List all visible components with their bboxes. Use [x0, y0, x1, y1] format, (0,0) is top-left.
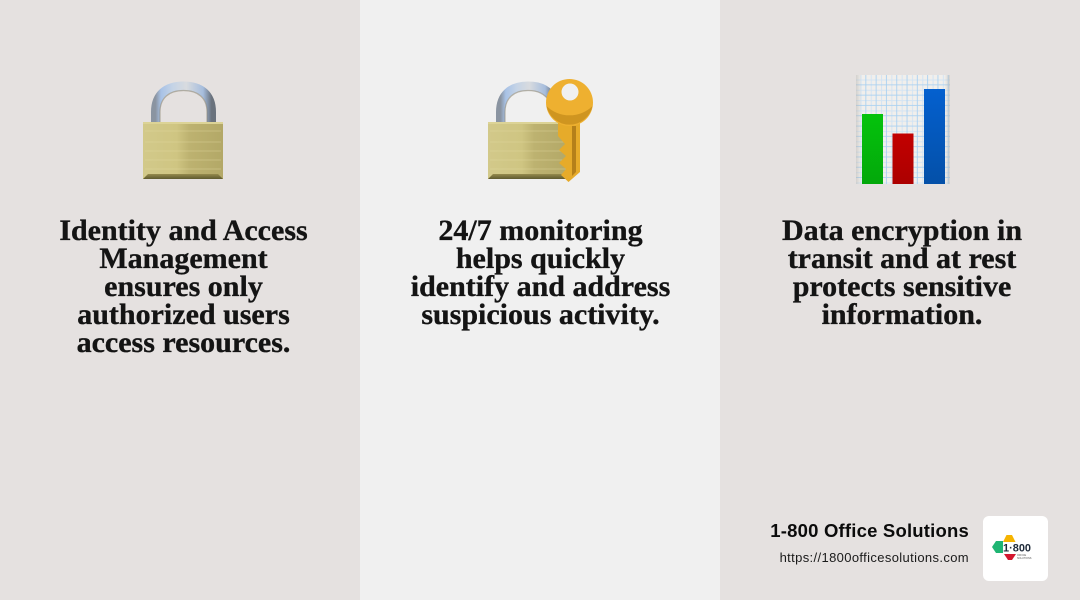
- icon: padlock with key: [488, 79, 593, 182]
- text: encryption: Data encryption in: [782, 214, 1022, 247]
- logo card: [983, 516, 1048, 581]
- icon: bar chart: [856, 75, 950, 184]
- text: monitoring: identify and address: [411, 270, 670, 303]
- logo mark: SOLUTIONS: [1017, 557, 1032, 560]
- panel: monitoring: [360, 0, 720, 600]
- text: identity and access: Management: [99, 242, 268, 275]
- text: monitoring: [411, 214, 670, 331]
- text: identity and access: [59, 214, 308, 359]
- text: identity and access: authorized users: [77, 298, 290, 331]
- panel: identity and access management: [0, 0, 360, 600]
- text: monitoring: 24/7 monitoring: [438, 214, 643, 247]
- footer url: https://1800officesolutions.com: [780, 550, 969, 565]
- text: monitoring: suspicious activity.: [421, 298, 660, 331]
- text: identity and access: Identity and Access: [59, 214, 308, 247]
- logo mark: OFFICE: [1017, 554, 1026, 557]
- icon: padlock: [143, 82, 223, 179]
- text: identity and access: access resources.: [77, 326, 290, 359]
- text: identity and access: ensures only: [104, 270, 263, 303]
- text: monitoring: helps quickly: [456, 242, 625, 275]
- text: encryption: [782, 214, 1022, 331]
- logo mark: 1·800: [1003, 542, 1031, 554]
- text: encryption: information.: [822, 298, 982, 331]
- text: encryption: protects sensitive: [793, 270, 1011, 303]
- footer brand name: 1-800 Office Solutions: [770, 520, 969, 541]
- logo mark: [992, 535, 1032, 560]
- text: encryption: transit and at rest: [788, 242, 1016, 275]
- panel: encryption: [720, 0, 1080, 600]
